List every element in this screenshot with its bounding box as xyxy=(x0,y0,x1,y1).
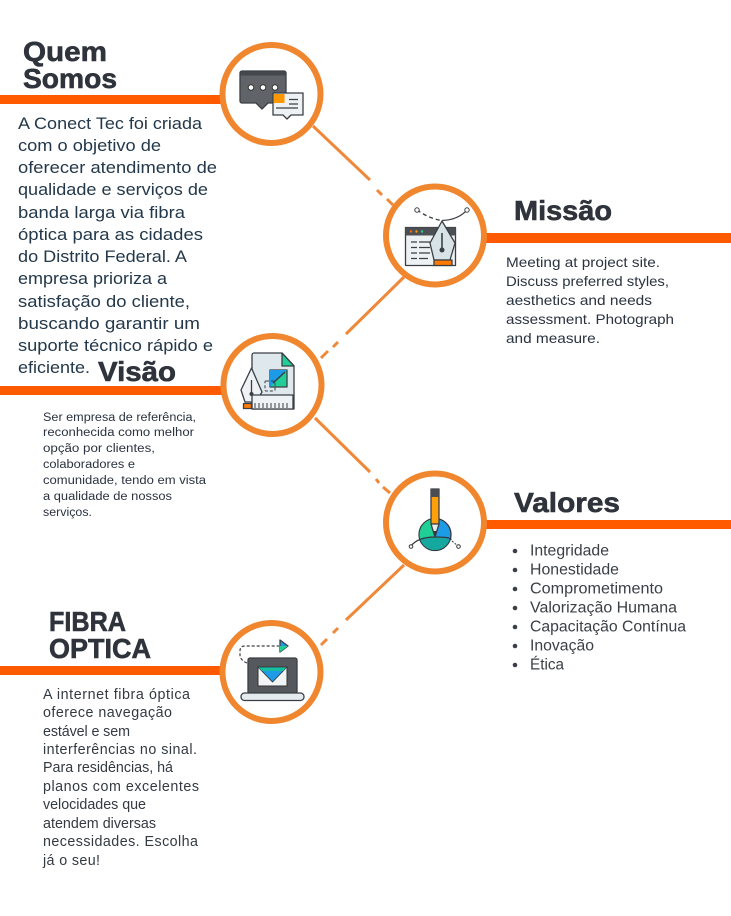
node: Valores circle xyxy=(386,474,484,572)
node: Visão circle xyxy=(224,336,322,434)
text block: Visão description: comunidade, tendo em vista xyxy=(43,475,207,487)
text block: Quem Somos description: óptica para as cidades xyxy=(18,226,203,244)
connector: Valores to Fibra Optica xyxy=(321,565,404,645)
icon: chat bubbles xyxy=(240,71,303,119)
node: Missão circle xyxy=(386,186,484,284)
heading: Fibra Optica: OPTICA xyxy=(49,633,151,664)
text block: Fibra Optica description: A internet fibra óptica xyxy=(43,687,190,703)
text block: Missão description xyxy=(506,254,674,346)
connector: Quem Somos to Missão xyxy=(313,126,393,205)
text block: Visão description: a qualidade de nossos xyxy=(43,491,172,503)
list: Valores items: Comprometimento xyxy=(530,580,663,598)
text block: Missão description: and measure. xyxy=(506,330,600,346)
text block: Quem Somos description: do Distrito Federal. A xyxy=(18,248,187,266)
list: Valores items xyxy=(513,542,687,674)
text block: Visão description: reconhecida como melhor xyxy=(43,427,194,439)
text block: Quem Somos description: satisfação do cliente, xyxy=(18,293,190,311)
icon: pencil over globe xyxy=(409,489,460,550)
node: Fibra Optica circle xyxy=(222,623,320,721)
connector: Visão to Valores xyxy=(315,418,390,493)
text block: Missão description: Meeting at project site. xyxy=(506,254,660,270)
text block: Quem Somos description: A Conect Tec foi criada xyxy=(18,115,203,133)
heading: Fibra Optica: FIBRA xyxy=(49,606,126,637)
heading: Fibra Optica xyxy=(49,606,151,664)
text block: Quem Somos description: com o objetivo de xyxy=(18,137,161,155)
text block: Missão description: assessment. Photograph xyxy=(506,311,674,327)
text block: Quem Somos description: buscando garantir um xyxy=(18,315,200,333)
text block: Fibra Optica description xyxy=(42,687,199,869)
list: Valores items: Inovação xyxy=(530,638,594,654)
bar: Missão xyxy=(482,233,731,243)
list: Valores items: Integridade xyxy=(530,542,609,560)
heading: Quem Somos: Somos xyxy=(23,63,117,94)
list: Valores items: Valorização Humana xyxy=(530,600,677,616)
text block: Fibra Optica description: velocidades que xyxy=(43,797,146,813)
icon: pen tool on browser window xyxy=(406,208,469,266)
list: Valores items: Honestidade xyxy=(530,562,619,578)
text block: Missão description: aesthetics and needs xyxy=(506,292,652,308)
text block: Fibra Optica description: necessidades. Escolha xyxy=(43,834,198,850)
text block: Missão description: Discuss preferred styles, xyxy=(506,273,669,289)
node: Quem Somos circle xyxy=(222,45,320,143)
heading: Missão: Missão xyxy=(514,195,612,226)
icon: laptop with envelope xyxy=(240,640,304,700)
text block: Visão description: serviços. xyxy=(43,507,92,519)
heading: Quem Somos: Quem xyxy=(23,36,107,67)
text block: Fibra Optica description: estável e sem xyxy=(43,724,130,740)
list: Valores items: Ética xyxy=(530,656,564,674)
text block: Fibra Optica description: Para residências, há xyxy=(43,760,173,776)
text block: Quem Somos description: eficiente. xyxy=(18,359,90,377)
bar: Valores xyxy=(482,520,731,529)
list: Valores items: Capacitação Contínua xyxy=(530,618,687,636)
text block: Quem Somos description: banda larga via fibra xyxy=(18,204,186,222)
bar: Fibra Optica xyxy=(0,666,225,675)
text block: Visão description: colaboradores e xyxy=(43,459,135,471)
text block: Fibra Optica description: oferece navegação xyxy=(43,705,172,721)
heading: Valores: Valores xyxy=(514,487,620,518)
text block: Visão description xyxy=(43,412,207,519)
text block: Quem Somos description xyxy=(18,115,217,377)
text block: Visão description: Ser empresa de referência, xyxy=(43,412,196,424)
heading: Quem Somos xyxy=(23,36,117,94)
connector: Missão to Visão xyxy=(321,277,404,358)
text block: Fibra Optica description: interferências no sinal. xyxy=(43,742,197,758)
text block: Fibra Optica description: planos com excelentes xyxy=(43,779,199,795)
heading: Visão: Visão xyxy=(98,356,176,387)
text block: Quem Somos description: empresa prioriza a xyxy=(18,270,168,288)
bar: Visão xyxy=(0,386,225,395)
text block: Quem Somos description: qualidade e serviços de xyxy=(18,181,208,199)
text block: Visão description: opção por clientes, xyxy=(43,443,155,455)
text block: Quem Somos description: suporte técnico rápido e xyxy=(18,337,213,355)
icon: document with pen and ruler xyxy=(241,353,294,409)
text block: Quem Somos description: oferecer atendimento de xyxy=(18,159,217,177)
bar: Quem Somos xyxy=(0,95,225,104)
text block: Fibra Optica description: atendem diversas xyxy=(43,816,156,832)
text block: Fibra Optica description: já o seu! xyxy=(42,853,100,869)
